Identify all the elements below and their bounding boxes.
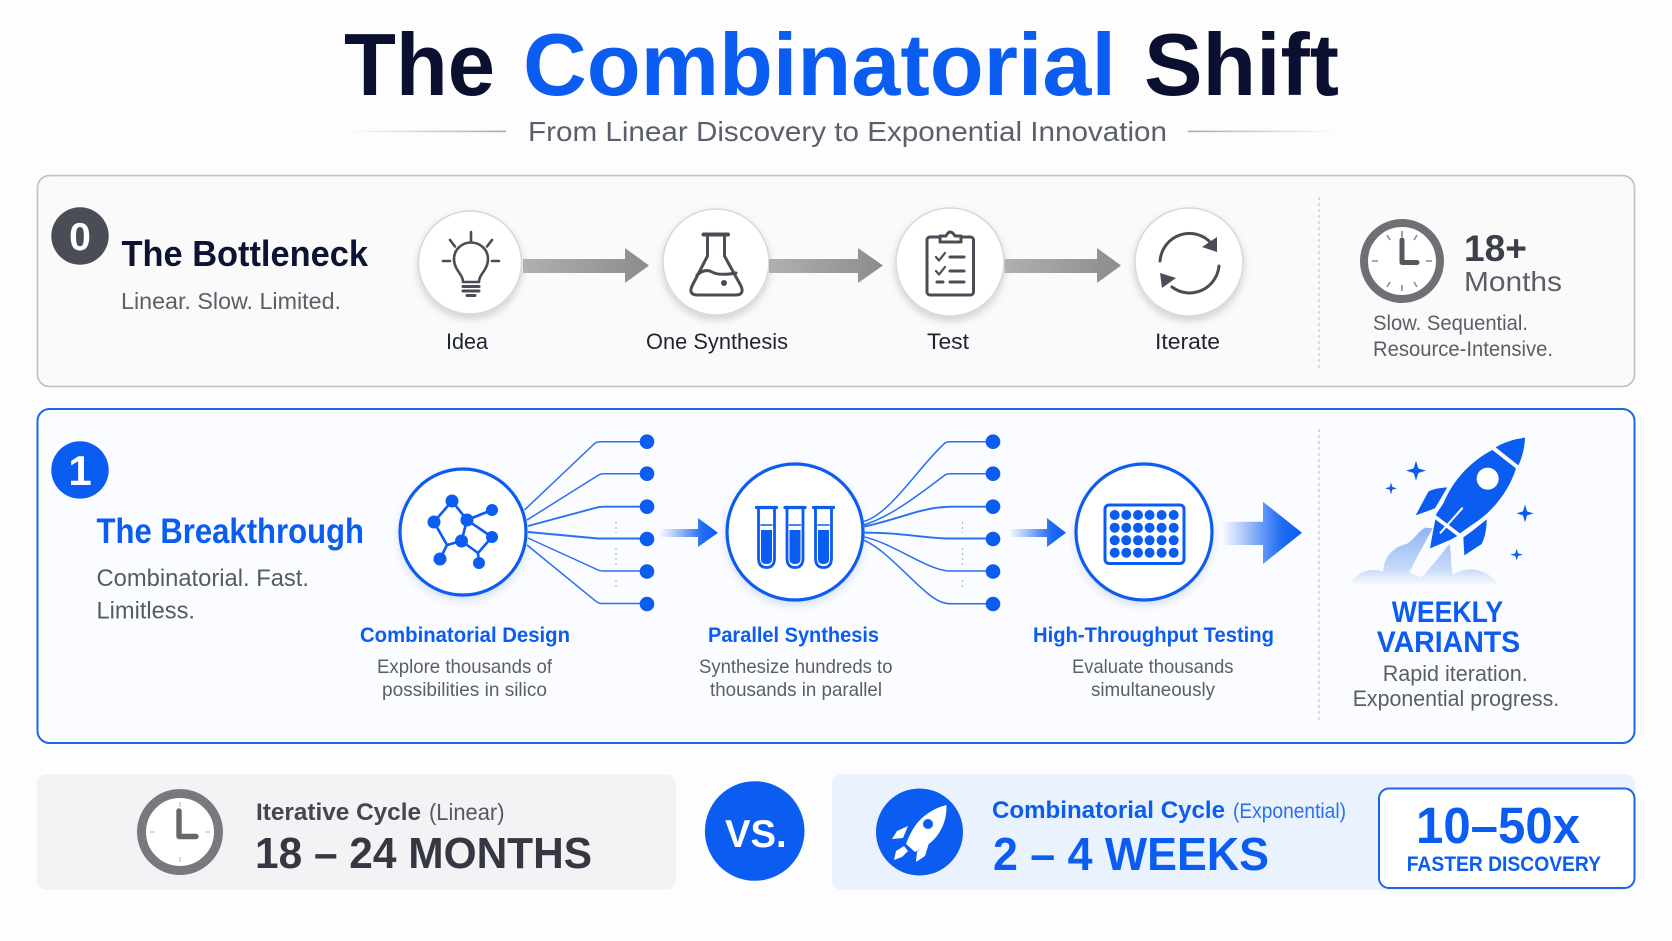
- callout: 10-50x faster discovery: [1379, 788, 1634, 888]
- label: parallel synthesis: [699, 624, 893, 701]
- icon: test tubes: [727, 464, 863, 600]
- label: parallel synthesis: Synthesize hundreds to: [699, 656, 893, 678]
- icon: iterate cycle: [1135, 208, 1243, 316]
- panel: iterative cycle: [36, 774, 676, 890]
- fan-out: design variants: [524, 434, 654, 611]
- heading: the bottleneck: The Bottleneck: [122, 233, 369, 274]
- badge: 0: 0: [69, 216, 91, 259]
- icon: flask: [663, 209, 769, 315]
- badge: vs: [705, 781, 804, 881]
- text: weekly variants: [1377, 596, 1520, 659]
- stat: 18-24 months: 18 – 24 MONTHS: [255, 829, 592, 878]
- icon: clipboard checklist: [896, 208, 1004, 316]
- text: weekly variants: WEEKLY: [1392, 596, 1503, 629]
- panel: the bottleneck: [38, 176, 1634, 386]
- text: combinatorial fast limitless: [96, 565, 309, 624]
- arrow: synthesis to test: [769, 248, 883, 283]
- text: slow sequential resource-intensive: Resource-Intensive.: [1373, 338, 1553, 361]
- label: combinatorial design: [360, 624, 570, 701]
- badge: 0: [51, 207, 109, 265]
- text: rapid iteration exponential progress: [1353, 661, 1559, 711]
- label: high-throughput testing: Evaluate thousands: [1072, 656, 1234, 678]
- heading: combinatorial cycle: Combinatorial Cycle: [992, 797, 1225, 824]
- callout: 10-50x faster discovery: 10–50x: [1416, 797, 1580, 854]
- callout: 10-50x faster discovery: FASTER DISCOVERY: [1407, 853, 1601, 876]
- badge: 1: [51, 441, 109, 499]
- label: parallel synthesis: thousands in parallel: [710, 679, 882, 701]
- heading: iterative cycle: [256, 799, 504, 826]
- arrow: synthesis to testing: [1008, 518, 1066, 547]
- stat: 18+ months: [1464, 228, 1562, 297]
- subtitle: From Linear Discovery to Exponential Innovation: [528, 116, 1167, 147]
- stat: 18+ months: 18+: [1464, 228, 1527, 269]
- title: Shift: [1144, 15, 1339, 114]
- heading: iterative cycle: Iterative Cycle: [256, 799, 421, 826]
- title: [344, 15, 1339, 114]
- panel: combinatorial cycle: [832, 774, 1635, 890]
- text: slow sequential resource-intensive: [1373, 312, 1553, 361]
- heading: combinatorial cycle: (Exponential): [1233, 800, 1346, 823]
- label: high-throughput testing: [1033, 624, 1274, 701]
- icon: clock: [1364, 223, 1440, 299]
- heading: the breakthrough: The Breakthrough: [96, 512, 364, 551]
- label: high-throughput testing: simultaneously: [1091, 679, 1215, 701]
- text: rapid iteration exponential progress: Exponential progress.: [1353, 686, 1559, 711]
- label: combinatorial design: possibilities in silico: [382, 679, 547, 701]
- icon: idea light bulb: [418, 211, 522, 314]
- arrow: test to iterate: [1004, 248, 1121, 283]
- arrow: design to synthesis: [659, 518, 718, 547]
- stat: 18+ months: Months: [1464, 266, 1562, 297]
- fan-out: synthesis batches: [863, 434, 1000, 611]
- label: test: Test: [927, 329, 970, 354]
- icon: clock: [142, 794, 218, 870]
- text: rapid iteration exponential progress: Rapid iteration.: [1383, 661, 1528, 686]
- badge: 1: 1: [68, 447, 92, 494]
- label: combinatorial design: Explore thousands of: [377, 656, 553, 678]
- label: parallel synthesis: Parallel Synthesis: [708, 624, 879, 647]
- icon: molecule: [400, 469, 526, 595]
- text: linear slow limited: Linear. Slow. Limited.: [121, 288, 341, 314]
- badge: vs: VS.: [725, 813, 787, 856]
- icon: well plate: [1076, 464, 1212, 600]
- text: slow sequential resource-intensive: Slow. Sequential.: [1373, 312, 1528, 335]
- text: combinatorial fast limitless: Limitless.: [96, 598, 195, 624]
- label: high-throughput testing: High-Throughput Testing: [1033, 624, 1274, 647]
- title: Combinatorial: [523, 15, 1116, 114]
- label: idea: Idea: [446, 329, 488, 354]
- label: iterate: Iterate: [1155, 329, 1220, 354]
- title: The: [344, 15, 495, 114]
- arrow: idea to synthesis: [523, 248, 649, 283]
- panel: the breakthrough: [38, 409, 1634, 743]
- text: combinatorial fast limitless: Combinatorial. Fast.: [96, 565, 309, 592]
- icon: rocket launch: [1350, 438, 1534, 584]
- icon: rocket badge: [876, 788, 963, 876]
- heading: iterative cycle: (Linear): [429, 799, 504, 825]
- text: weekly variants: VARIANTS: [1377, 626, 1520, 659]
- heading: combinatorial cycle: [992, 797, 1346, 824]
- arrow: testing to weekly variants: [1221, 502, 1302, 564]
- stat: 2-4 weeks: 2 – 4 WEEKS: [993, 828, 1269, 880]
- label: combinatorial design: Combinatorial Design: [360, 624, 570, 647]
- label: one synthesis: One Synthesis: [646, 329, 788, 354]
